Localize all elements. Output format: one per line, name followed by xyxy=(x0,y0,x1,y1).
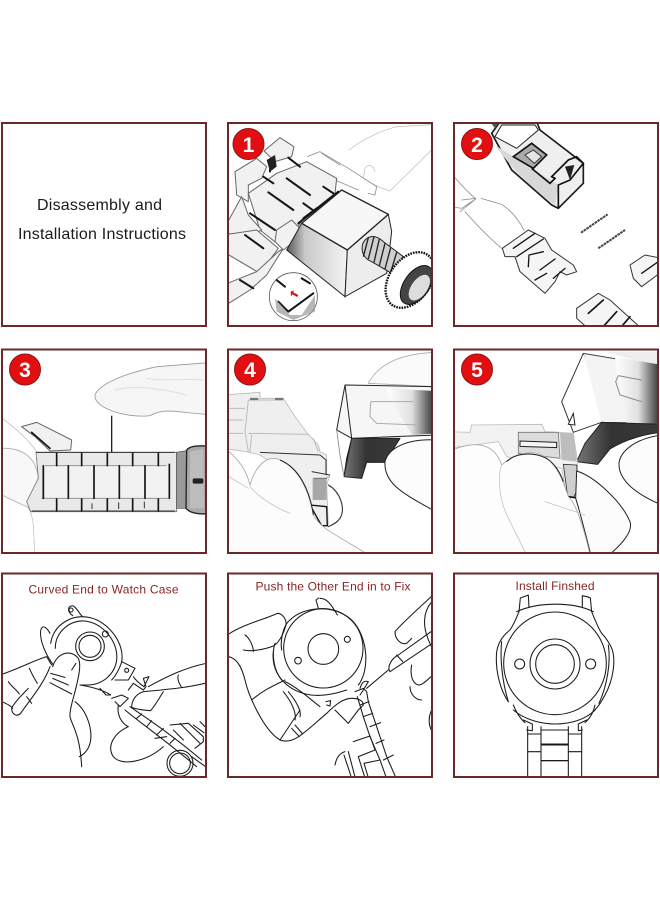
hand and removed link xyxy=(3,418,37,552)
panel: step 4 xyxy=(220,350,437,562)
strap xyxy=(349,124,437,191)
slots xyxy=(240,158,333,288)
badge 3: 3 xyxy=(19,359,31,382)
panel: step 5 xyxy=(448,350,660,562)
caption: Install Finshed xyxy=(516,579,594,593)
right hand and bracelet xyxy=(111,663,210,776)
link bottom xyxy=(576,292,638,325)
bracelet xyxy=(523,720,587,783)
strap xyxy=(452,173,524,248)
panel: curved end to watch case xyxy=(0,574,210,777)
left hand xyxy=(225,613,363,741)
tool block xyxy=(287,223,347,297)
instruction sheet xyxy=(1,122,659,778)
title text xyxy=(18,197,186,243)
thumb right xyxy=(619,435,660,505)
hand xyxy=(576,471,631,558)
badge 2: 2 xyxy=(471,134,483,157)
pin xyxy=(111,416,112,452)
tool xyxy=(583,353,660,423)
badge 4 xyxy=(234,354,266,385)
caption: Curved End to Watch Case xyxy=(28,582,179,596)
badge 1 xyxy=(233,128,264,160)
link right xyxy=(630,255,660,287)
badge 4: 4 xyxy=(244,359,256,382)
finger xyxy=(95,362,213,416)
panel: install finished xyxy=(454,574,658,783)
tool xyxy=(337,385,437,438)
bracelet links xyxy=(235,158,267,202)
thumb xyxy=(384,439,431,510)
bracelet xyxy=(448,424,578,498)
left hand xyxy=(0,653,91,767)
clasp xyxy=(502,230,577,293)
inset circle xyxy=(269,273,317,321)
knob xyxy=(384,251,431,309)
panel: step 1 xyxy=(223,123,445,326)
badge 3 xyxy=(10,354,40,385)
watch xyxy=(273,598,366,695)
clasp xyxy=(176,450,186,509)
title text: Installation Instructions xyxy=(18,226,186,243)
pins xyxy=(581,214,625,248)
background hand top xyxy=(606,352,657,364)
bracelet xyxy=(27,452,177,512)
badge 5: 5 xyxy=(471,359,483,382)
badge 5 xyxy=(462,354,492,385)
panel: step 3 xyxy=(0,350,213,558)
watch xyxy=(41,606,149,695)
background finger xyxy=(368,352,437,387)
watch case xyxy=(496,595,614,724)
panel: title xyxy=(2,123,206,326)
removal tool xyxy=(492,122,583,208)
panel: step 2 xyxy=(452,122,660,332)
right hand and tool xyxy=(389,592,437,733)
bracelet xyxy=(223,392,330,525)
panel: push the other end in xyxy=(225,574,437,783)
hand xyxy=(229,451,364,552)
caption: Push the Other End in to Fix xyxy=(256,580,410,594)
bracelet xyxy=(335,670,398,783)
badge 1: 1 xyxy=(243,134,255,157)
screw xyxy=(362,236,403,273)
badge 2 xyxy=(462,128,492,160)
title text: Disassembly and xyxy=(37,197,162,214)
